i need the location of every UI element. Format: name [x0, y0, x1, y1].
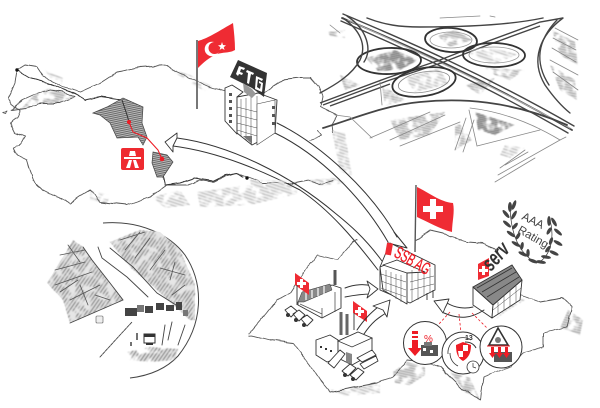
Switzerland outline [250, 230, 572, 400]
Rating label: Rating [516, 224, 550, 251]
road edges [70, 247, 185, 357]
logo: serv: serv [476, 236, 515, 275]
queue of trucks [125, 302, 188, 316]
Turkey outline [8, 65, 337, 205]
map: Switzerland [250, 180, 583, 400]
sign: SSB AG: SSB AG [391, 242, 434, 278]
building: SSB AG [380, 243, 435, 304]
route endpoint dots [15, 68, 249, 180]
left mountain base [47, 240, 123, 323]
trucks: factory two [328, 350, 378, 381]
region: northern province [93, 98, 147, 145]
foreground hatching [127, 347, 178, 362]
circular arrow: serv to SSB AG [434, 299, 484, 317]
cloverleaf loops [357, 26, 525, 101]
circle: interest reduction [404, 322, 446, 364]
region: southern province [152, 152, 173, 177]
left mountain [47, 240, 123, 323]
building: Turkish company [225, 85, 277, 145]
main carriageway SW-NE [320, 18, 563, 106]
icon: motorway sign [121, 148, 144, 170]
building: serv [473, 265, 522, 318]
outer ramps [320, 16, 570, 128]
lower verge lines [330, 16, 578, 182]
circle outline [103, 223, 199, 378]
right mountain [110, 230, 195, 320]
arrow: from Turkish company to SSB AG [275, 123, 407, 248]
flag: Turkey [197, 23, 235, 109]
highway dark line south [162, 172, 243, 185]
arrow: factory one to SSB AG [345, 281, 378, 298]
flag: factory two [353, 301, 367, 330]
right mountain base [110, 230, 195, 320]
highway dark line north [17, 70, 122, 100]
flag: factory one [295, 273, 309, 305]
mountain detail strokes [55, 232, 185, 305]
coast hatching: Turkey [20, 69, 352, 208]
truck on road [144, 334, 155, 345]
circle: guarantee term [442, 332, 484, 374]
map: Turkey [3, 65, 352, 208]
wreath leaves right [536, 216, 563, 265]
flag: Switzerland [415, 185, 454, 252]
region divider [122, 100, 129, 122]
vehicle on left [96, 316, 103, 323]
figures [131, 333, 137, 346]
illustration: mountain road in circle [47, 223, 199, 378]
Sea of Marmara outline [3, 90, 75, 113]
dashed connectors [438, 312, 487, 333]
interchange illustration [320, 14, 578, 182]
circle: guarantee term: 13 [465, 335, 473, 342]
arrow: factory two to SSB AG [357, 300, 390, 334]
coast hatching: Switzerland [250, 180, 583, 400]
circle: risk reduction [480, 326, 522, 368]
AAA rating wreath [501, 200, 563, 265]
trucks: factory one [285, 306, 313, 327]
main carriageway NW-SE [341, 14, 574, 133]
circle: interest reduction: % [424, 334, 433, 345]
interchange hatching [328, 30, 578, 158]
logo: Turkish company [230, 60, 267, 98]
AAA label: AAA [520, 211, 546, 232]
arrow: SSB AG to Turkey [165, 133, 382, 270]
factory two [316, 312, 372, 365]
wreath leaves left [501, 200, 538, 264]
red highway route [127, 120, 164, 161]
factory one [298, 270, 341, 318]
